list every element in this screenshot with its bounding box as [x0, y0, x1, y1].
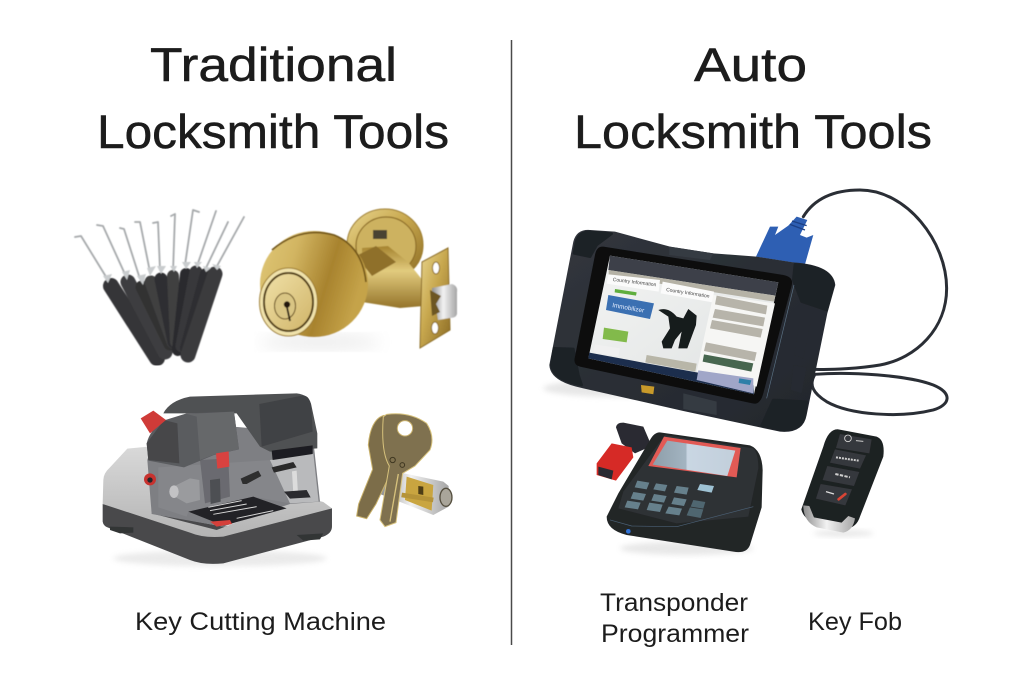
face plate: [420, 248, 450, 348]
blue connector: [756, 217, 813, 264]
panel: traditional locksmith tools: [75, 38, 457, 636]
red screen bezel: [648, 437, 741, 477]
red round dial: [144, 473, 156, 485]
red clamp button: [216, 451, 229, 469]
label: key cutting machine: Key Cutting Machine: [135, 608, 386, 636]
back wall fill: [147, 420, 320, 527]
icon: brass deadbolt lock: [260, 209, 457, 348]
green button: [603, 328, 628, 342]
screen display: [588, 256, 778, 394]
icon: transponder programmer: [597, 423, 763, 555]
back key: [357, 415, 392, 519]
icon: keys and cylinder: [357, 414, 452, 527]
cutter head: [147, 412, 239, 467]
heading: traditional locksmith tools: [97, 38, 449, 158]
red lever knob: [141, 411, 166, 433]
deck: [103, 447, 332, 537]
latch bolt: [432, 284, 457, 320]
vehicle key graphic: [658, 309, 697, 348]
cable: [803, 190, 947, 415]
icon: lock pick set: [75, 210, 244, 358]
black key tray: [188, 497, 287, 526]
icon: diagnostic tablet with cable: Country Information: [612, 277, 657, 288]
lcd screen: [653, 441, 735, 476]
heading: auto locksmith tools: Auto: [694, 38, 807, 91]
rear rose: [347, 209, 423, 281]
icon: key cutting machine: [103, 393, 332, 566]
icon: diagnostic tablet with cable: Country Information: [666, 287, 710, 300]
label: transponder programmer: Transponder: [600, 589, 748, 617]
icon: key fob: [801, 429, 884, 537]
front key: [380, 414, 432, 527]
status bar: [588, 353, 754, 394]
black handle: [241, 471, 261, 484]
keypad: [625, 481, 714, 518]
screen header: [608, 256, 778, 296]
right pane: [697, 295, 775, 387]
knob body: [260, 231, 368, 337]
icon: diagnostic tablet with cable: Immobilizer: [612, 302, 645, 315]
slot: [272, 445, 313, 460]
label: transponder programmer: [600, 589, 749, 648]
silver thumb wheel: [173, 478, 200, 503]
top housing: [163, 393, 317, 452]
label: key fob: Key Fob: [808, 608, 902, 636]
rugged casing: [549, 230, 835, 432]
screen bezel: [574, 247, 792, 404]
device body: [607, 432, 763, 552]
fob buttons: [816, 434, 872, 505]
connector: [616, 423, 650, 453]
panel: auto locksmith tools: [543, 38, 947, 648]
center divider: [510, 40, 512, 645]
heading: traditional locksmith tools: Locksmith Tools: [97, 105, 449, 158]
heading: auto locksmith tools: Locksmith Tools: [574, 105, 932, 158]
heading: auto locksmith tools: [574, 38, 932, 158]
tabs: [607, 274, 714, 302]
lower housing: [158, 460, 290, 517]
heading: traditional locksmith tools: Traditional: [150, 38, 397, 91]
blue button: [606, 295, 654, 319]
right menu pills: [704, 296, 767, 361]
corner bumpers: [551, 232, 833, 430]
icon: diagnostic tablet with cable: [543, 190, 947, 432]
keyhole: [274, 293, 296, 319]
bolt housing: [362, 246, 424, 308]
lock cylinder: [380, 470, 449, 515]
label: transponder programmer: Programmer: [601, 620, 749, 648]
chrome tip: [803, 505, 855, 533]
machine base: [103, 504, 332, 564]
